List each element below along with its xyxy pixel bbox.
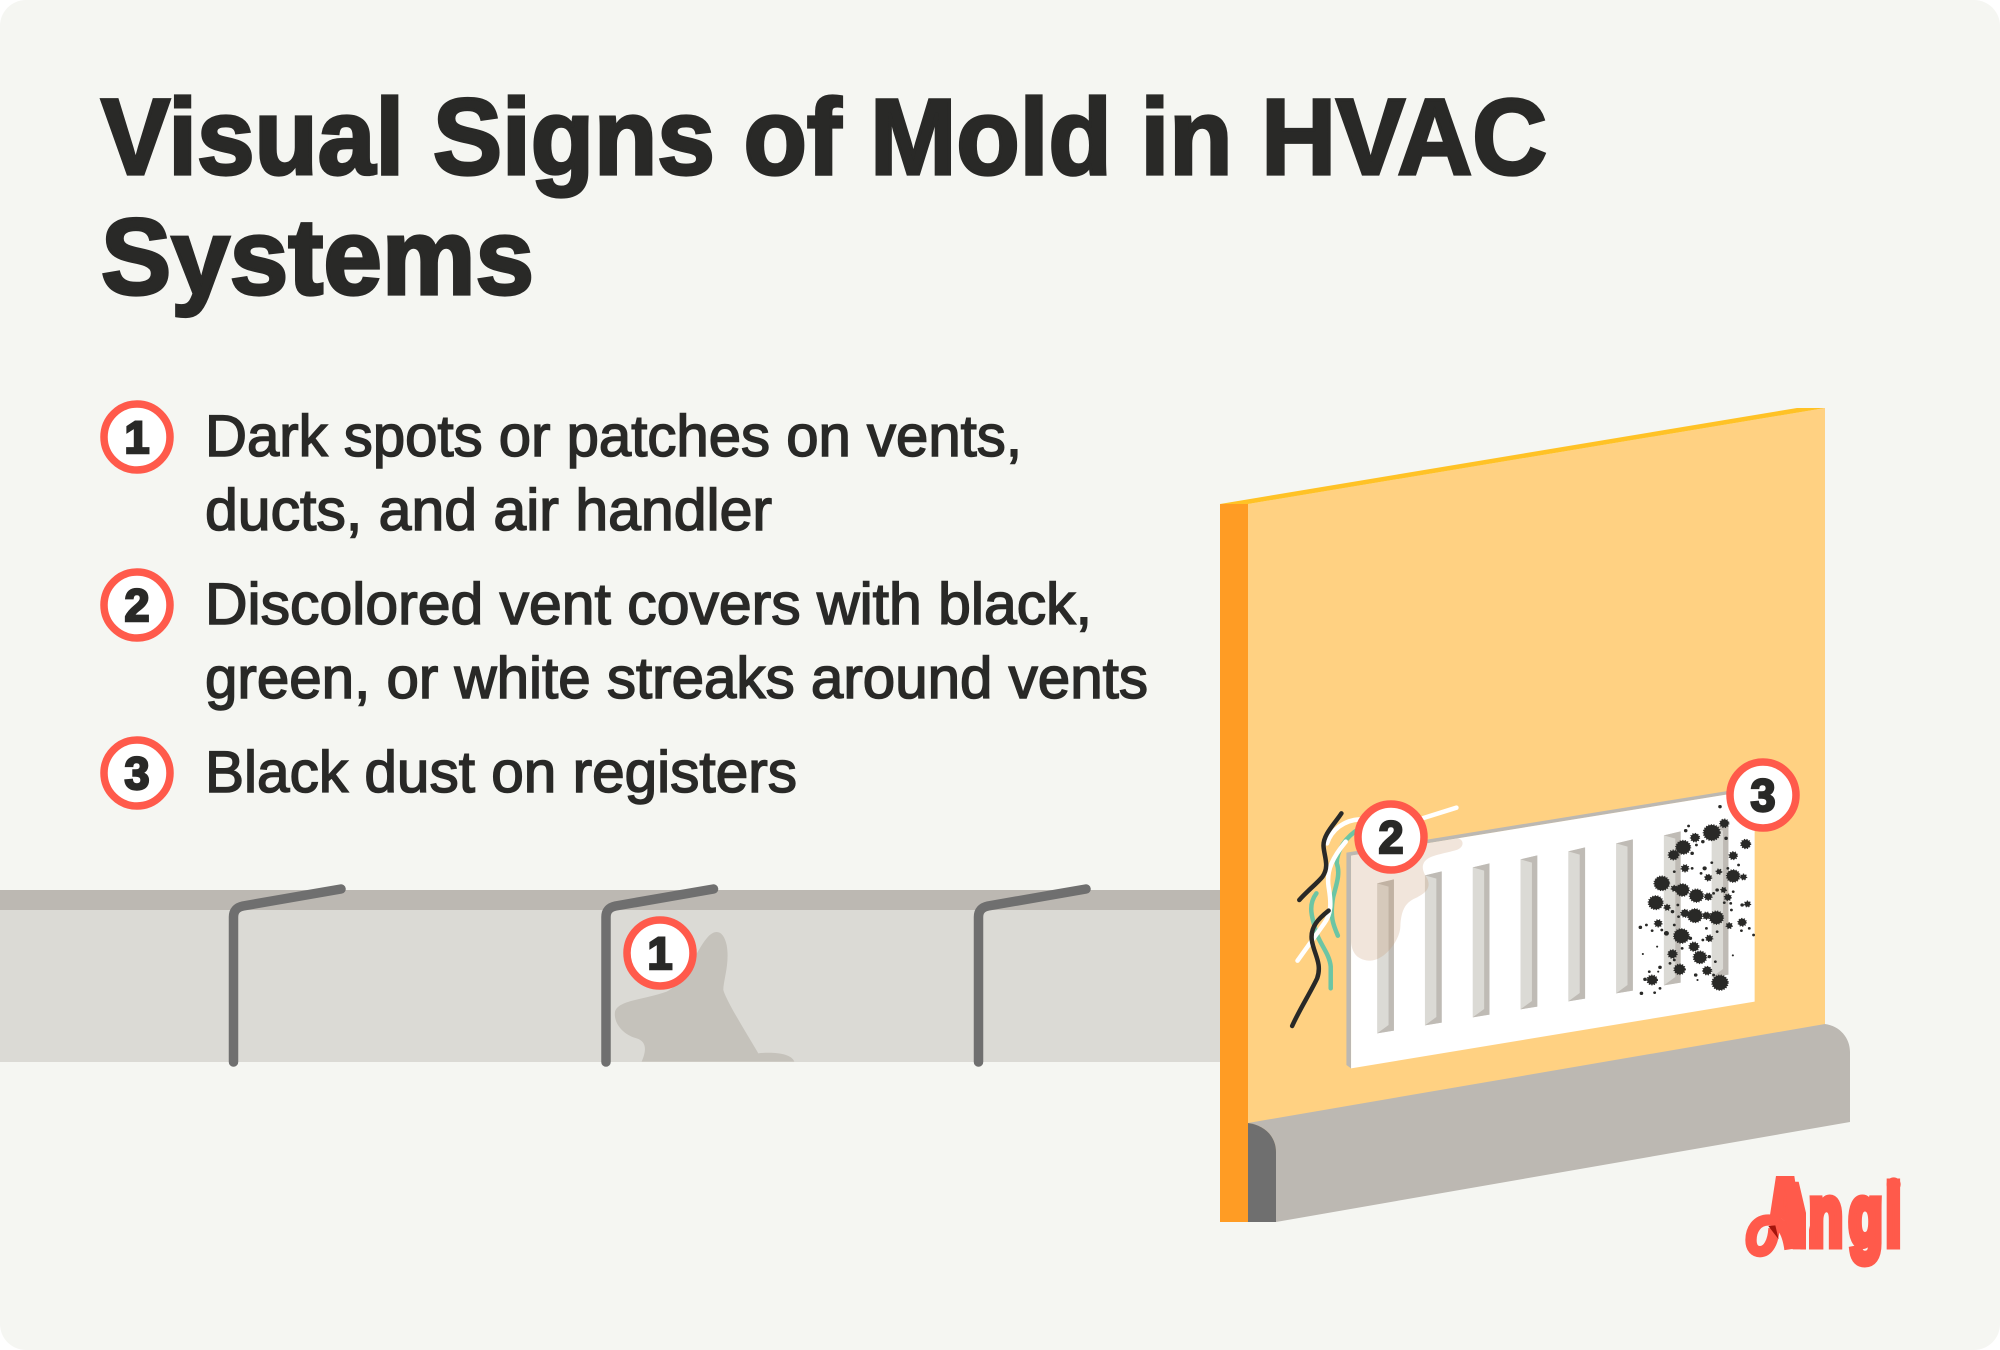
dark mold spot on duct bbox=[615, 932, 794, 1062]
callout 3: 3 bbox=[1750, 770, 1776, 821]
callout 1 bbox=[627, 920, 693, 986]
list item 2: Discolored vent covers with black, bbox=[205, 572, 1092, 637]
title bbox=[101, 76, 1547, 317]
title: Systems bbox=[101, 196, 534, 317]
list item 2: green, or white streaks around vents bbox=[205, 646, 1148, 711]
list item 3: Black dust on registers bbox=[205, 740, 797, 805]
wall section bbox=[1220, 408, 1825, 1222]
Angi logo: Angi bbox=[1772, 1169, 1901, 1264]
black dust on register bbox=[1639, 805, 1755, 995]
list item 3: 3 bbox=[124, 748, 150, 799]
list of signs bbox=[104, 404, 1148, 806]
callout 2 bbox=[1358, 804, 1424, 870]
duct run bbox=[0, 889, 1221, 1062]
list item 1: 1 bbox=[124, 412, 150, 463]
callout 1: 1 bbox=[647, 928, 673, 979]
colored streaks around vent bbox=[1292, 808, 1456, 1026]
title: Visual Signs of Mold in HVAC bbox=[101, 76, 1547, 197]
list item 1 bbox=[104, 404, 1022, 543]
baseboard bbox=[1248, 1024, 1850, 1222]
list item 2: 2 bbox=[124, 580, 150, 631]
list item 1: ducts, and air handler bbox=[205, 478, 772, 543]
vent register bbox=[1346, 787, 1755, 1068]
callout 3 bbox=[1730, 762, 1796, 828]
duct support brackets bbox=[234, 889, 1086, 1062]
callout 2: 2 bbox=[1378, 812, 1404, 863]
list item 2 bbox=[104, 572, 1148, 711]
discoloration stain on vent bbox=[1351, 838, 1463, 961]
list item 1: Dark spots or patches on vents, bbox=[205, 404, 1022, 469]
